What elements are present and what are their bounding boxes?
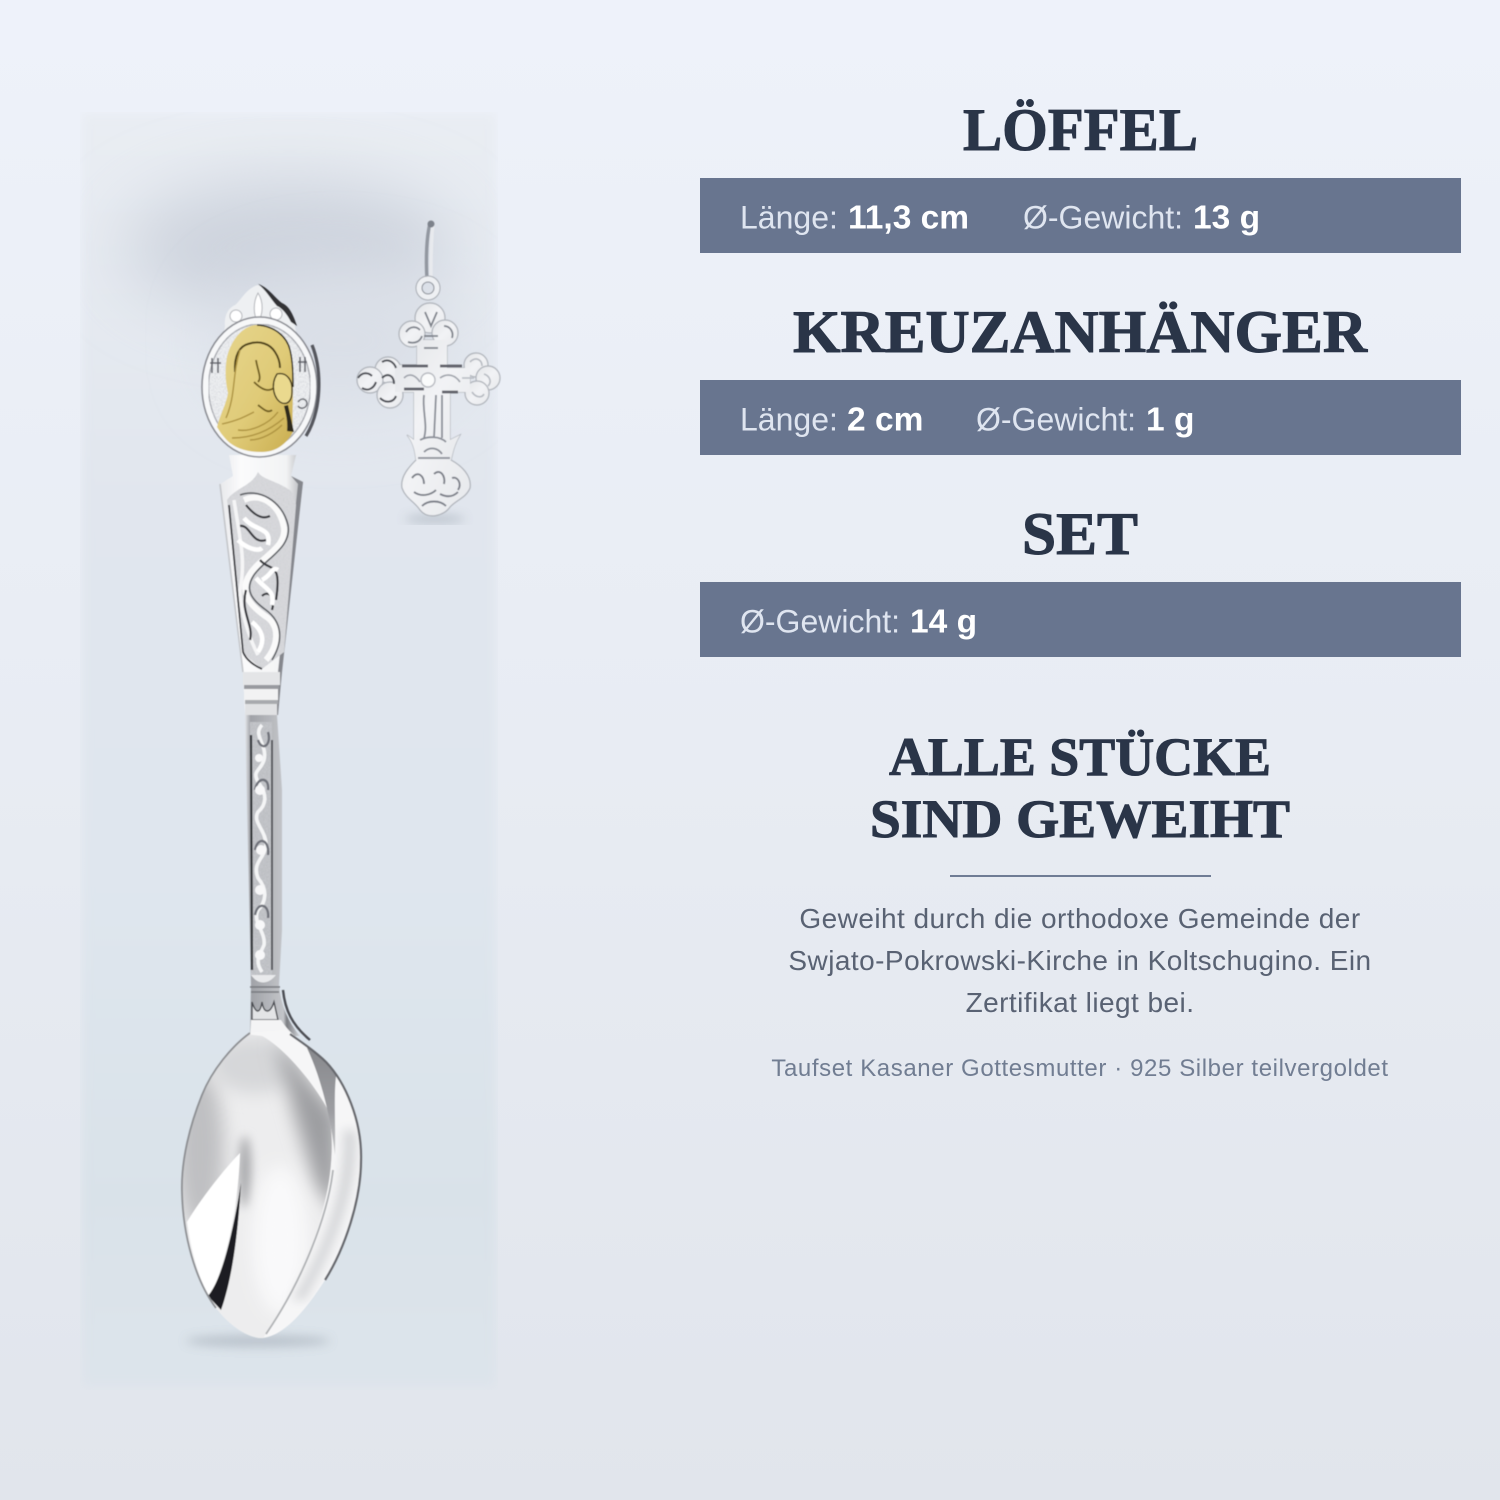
pendant loop <box>416 220 440 300</box>
divider <box>950 875 1211 877</box>
spec bar: Kreuzanhänger <box>700 380 1461 455</box>
rim band shading <box>292 1130 357 1300</box>
finial crown <box>224 285 296 332</box>
spec bar: Set: Ø-Gewicht: <box>740 604 900 640</box>
spec bar: Löffel <box>700 178 1461 253</box>
spec bar: Set <box>700 582 1461 657</box>
description text: Geweiht durch die orthodoxe Gemeinde der <box>799 903 1361 934</box>
heading: Kreuzanhänger: KREUZANHÄNGER <box>793 299 1368 365</box>
pendant shadow <box>405 515 465 523</box>
spec bar: Löffel: Länge: <box>740 200 838 236</box>
medallion lettering marks <box>210 357 307 373</box>
heading: Set: SET <box>1022 501 1138 567</box>
spec bar: Kreuzanhänger: Länge: <box>740 402 838 438</box>
scroll ornament on stem <box>255 725 269 972</box>
spec bar: Kreuzanhänger: 2 cm <box>847 402 923 438</box>
heading: Löffel: LÖFFEL <box>963 97 1198 163</box>
cross body <box>357 303 500 516</box>
handle collar bands <box>243 672 280 717</box>
heading: consecrated: SIND GEWEIHT <box>870 789 1290 849</box>
gold icon of the Virgin <box>217 325 294 452</box>
cross pendant <box>357 220 500 523</box>
heading: consecrated: ALLE STÜCKE <box>889 727 1271 787</box>
spoon <box>170 284 370 1347</box>
spoon shadow <box>186 1335 330 1347</box>
gray lens on the right rim <box>307 1048 337 1155</box>
description text: Zertifikat liegt bei. <box>966 987 1194 1018</box>
lower stem <box>245 715 310 1040</box>
spoon head: icon medallion <box>202 284 319 457</box>
upper handle <box>220 455 303 717</box>
spec bar: Löffel: 13 g <box>1193 200 1260 236</box>
engraved ornament on handle <box>227 472 296 669</box>
spec bar: Löffel: Ø-Gewicht: <box>1023 200 1183 236</box>
bowl interior shading <box>182 1034 332 1337</box>
footer caption: Taufset Kasaner Gottesmutter · 925 Silber teilvergoldet <box>771 1055 1389 1082</box>
cross engraving <box>358 312 490 506</box>
spec bar: Set: 14 g <box>910 604 977 640</box>
heading: consecrated <box>870 727 1290 849</box>
white reflection lower left <box>187 1153 240 1297</box>
bowl of the spoon <box>170 1030 370 1340</box>
dark reflection streak <box>208 1183 241 1310</box>
photo panel: soft background behind the spoon <box>86 136 493 1282</box>
description text <box>788 903 1372 1018</box>
spec bar: Kreuzanhänger: 1 g <box>1146 402 1194 438</box>
description text: Swjato-Pokrowski-Kirche in Koltschugino. Ein <box>788 945 1372 976</box>
spec bar: Löffel: 11,3 cm <box>848 200 969 236</box>
medallion rim <box>202 317 317 457</box>
spec bar: Kreuzanhänger: Ø-Gewicht: <box>976 402 1136 438</box>
bowl rim <box>182 1033 250 1308</box>
